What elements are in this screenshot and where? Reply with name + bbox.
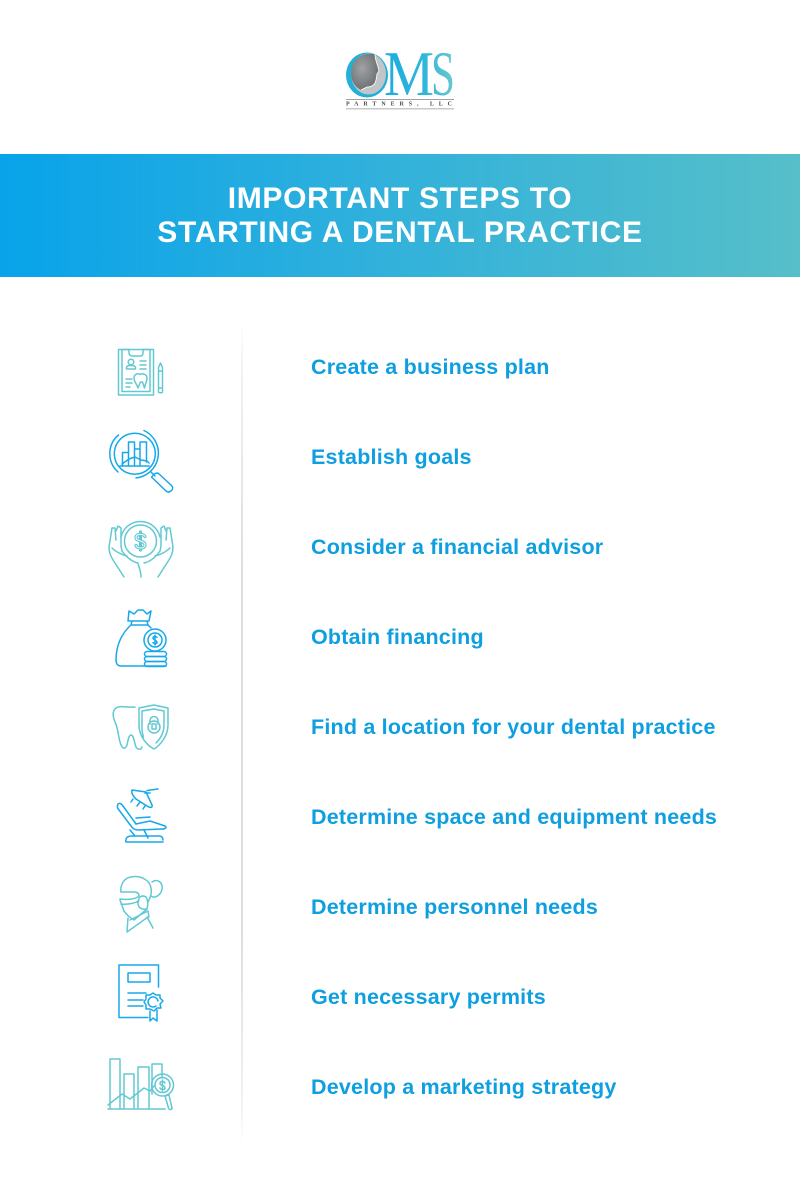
step 1 text: Create a business plan [311, 355, 550, 379]
icon: magnifier with chart [110, 430, 173, 492]
title: STARTING A DENTAL PRACTICE [157, 216, 643, 249]
icon: tooth with shield and lock [113, 705, 168, 749]
step 2 text: Establish goals [311, 445, 472, 469]
logo [346, 39, 455, 110]
step 3 text: Consider a financial advisor [311, 535, 603, 559]
icon: money bag with coins [116, 610, 166, 666]
icon: certificate document [119, 965, 163, 1021]
icon: bar chart with magnifier [108, 1059, 174, 1110]
logo: partners text: PARTNERS, LLC [346, 102, 452, 108]
step 9 text: Develop a marketing strategy [311, 1075, 617, 1099]
icon: hands holding coin [109, 521, 173, 577]
header banner [0, 154, 800, 277]
logo: MS letters: M [384, 39, 434, 109]
icon: dental chair with lamp [117, 789, 166, 842]
title: IMPORTANT STEPS TO [228, 182, 572, 215]
title [157, 182, 643, 249]
step 7 text: Determine personnel needs [311, 895, 598, 919]
step 6 text: Determine space and equipment needs [311, 805, 717, 829]
logo: O ring and face [346, 52, 388, 98]
logo: MS letters: S [431, 39, 455, 109]
step 8 text: Get necessary permits [311, 985, 546, 1009]
icon: clipboard with tooth and pencil [118, 350, 162, 395]
step 5 text: Find a location for your dental practice [311, 715, 716, 739]
icon: masked staff member [120, 877, 162, 932]
step 4 text: Obtain financing [311, 625, 484, 649]
